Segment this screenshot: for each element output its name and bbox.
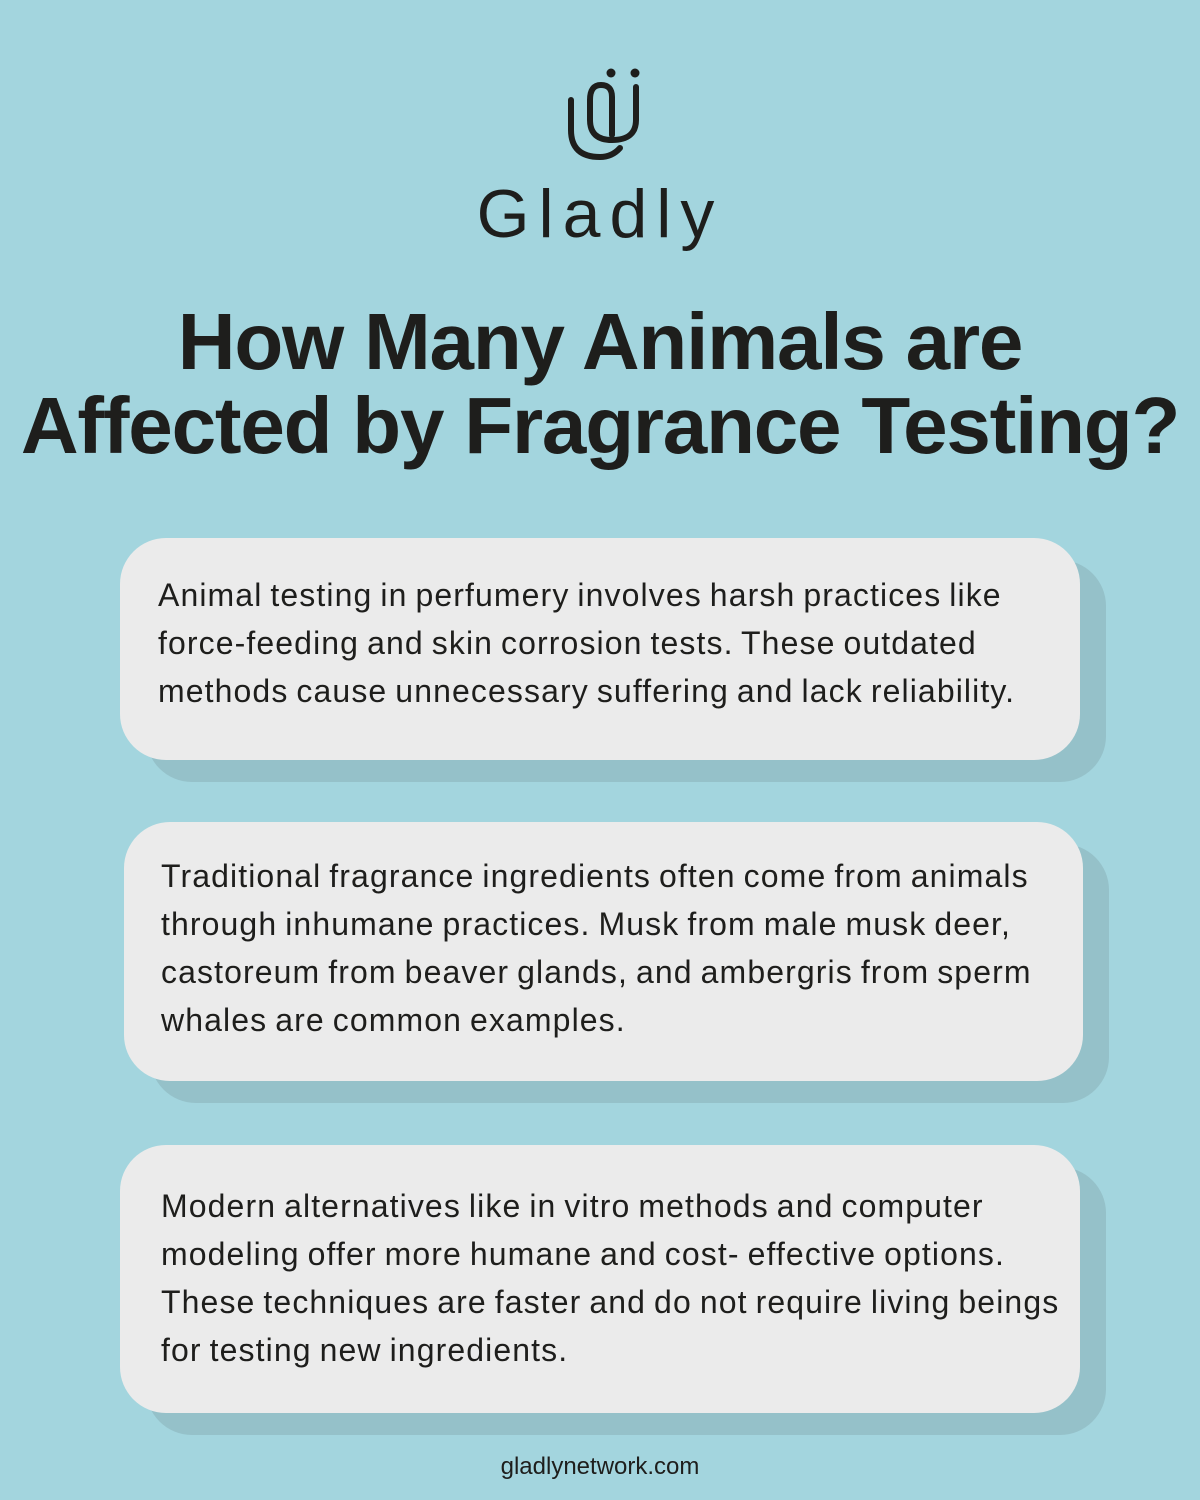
title: Affected by Fragrance Testing? [21,381,1179,470]
footer url: gladlynetwork.com [501,1453,699,1480]
card 3: Modern alternatives like in vitro methods and computer [161,1188,984,1224]
card 3: modeling offer more humane and cost- effective options. [161,1236,1005,1272]
card 1 [120,538,1080,760]
card 1: Animal testing in perfumery involves harsh practices like [158,577,1002,613]
card 2: through inhumane practices. Musk from male musk deer, [161,906,1011,942]
card 1: methods cause unnecessary suffering and lack reliability. [158,673,1015,709]
card 2 [124,822,1083,1081]
logo icon [568,68,640,160]
card 3: These techniques are faster and do not require living beings [161,1284,1059,1320]
card 2: Traditional fragrance ingredients often come from animals [161,858,1029,894]
card 1: force-feeding and skin corrosion tests. These outdated [158,625,977,661]
title [21,297,1179,470]
card 3: for testing new ingredients. [161,1332,568,1368]
card 2: castoreum from beaver glands, and ambergris from sperm [161,954,1032,990]
card 3 [120,1145,1080,1413]
title: How Many Animals are [178,297,1022,386]
card 2: whales are common examples. [161,1002,626,1038]
brand name: Gladly [477,176,723,252]
